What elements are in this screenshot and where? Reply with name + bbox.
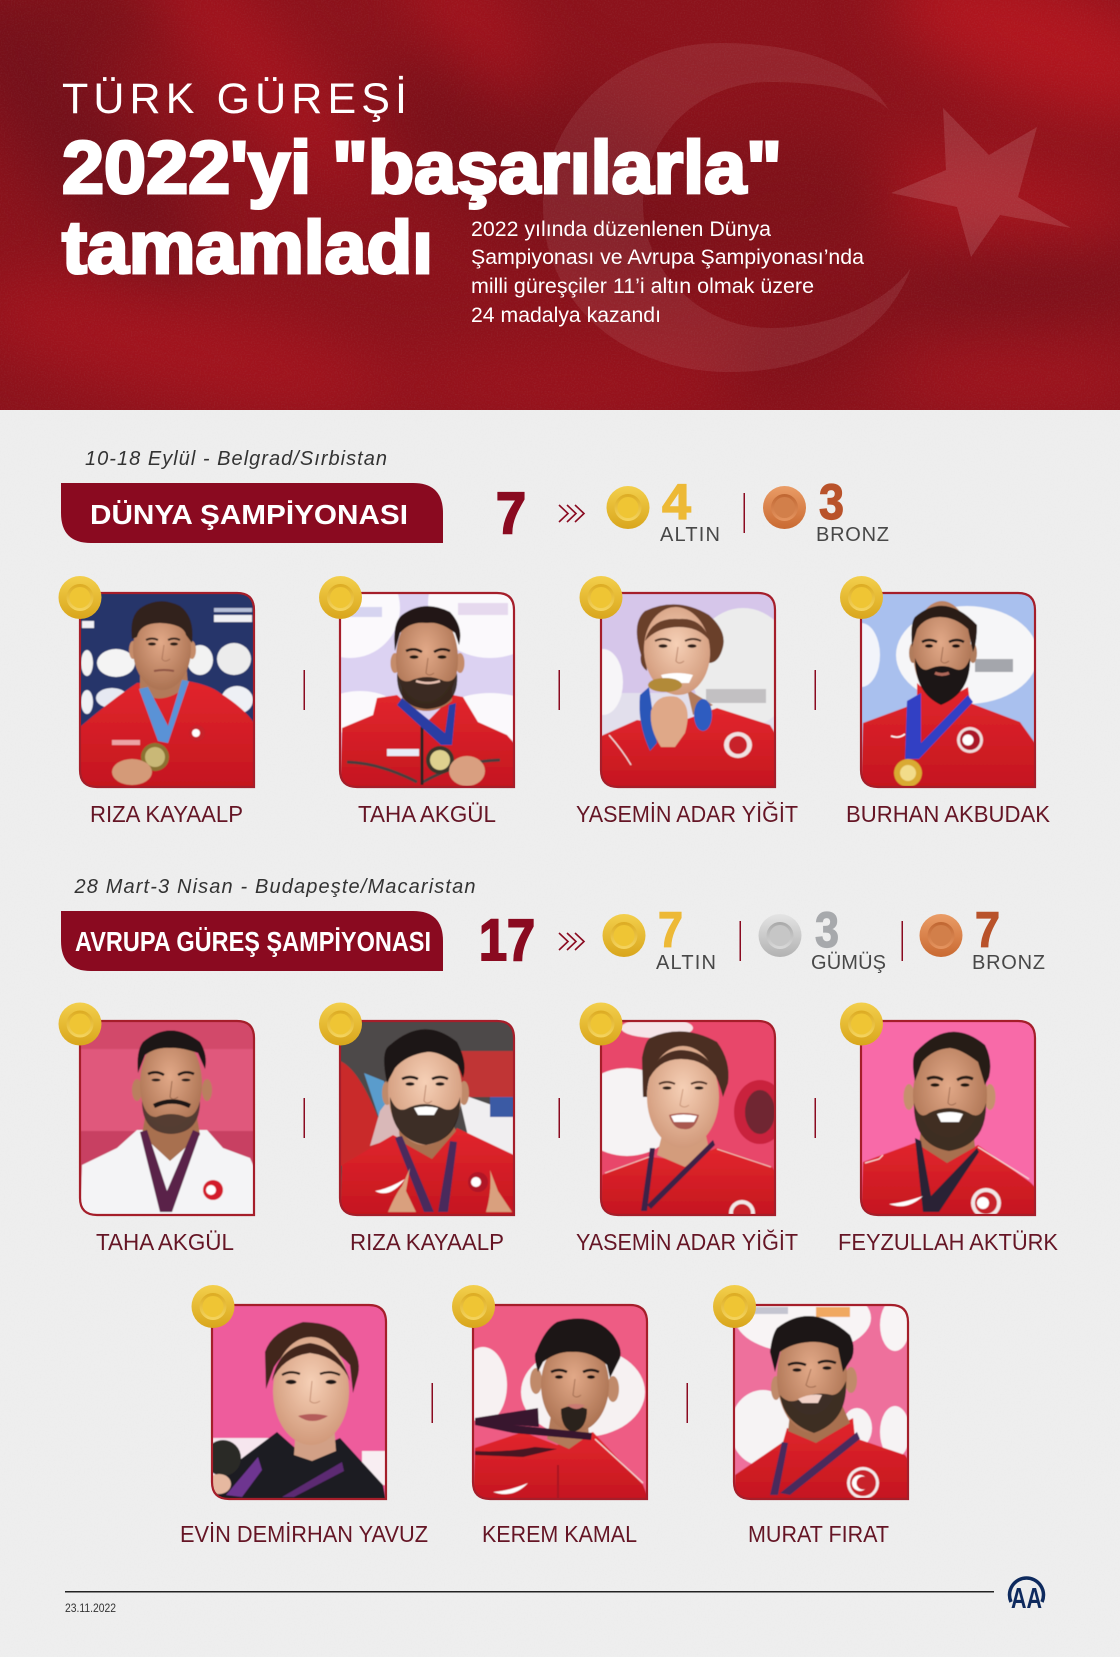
banner: DÜNYA ŞAMPİYONASI <box>90 499 408 530</box>
gold count <box>606 474 720 546</box>
name: RIZA KAYAALP <box>90 801 243 827</box>
star <box>891 108 1071 257</box>
medal <box>580 1002 622 1046</box>
name: KEREM KAMAL <box>482 1521 637 1547</box>
icon: AA logo <box>1010 1578 1044 1615</box>
medal <box>319 1002 362 1046</box>
medal <box>840 576 883 619</box>
athlete: Rıza Kayaalp (Avrupa) <box>319 1002 516 1255</box>
medal <box>713 1285 756 1328</box>
athlete: Kerem Kamal <box>452 1285 649 1547</box>
banner: AVRUPA GÜREŞ ŞAMPİYONASI <box>75 926 431 957</box>
bronze count: BRONZ <box>816 524 889 546</box>
date and place: 28 Mart-3 Nisan - Budapeşte/Macaristan <box>74 876 476 898</box>
medal <box>58 1002 102 1046</box>
silver count <box>758 902 886 974</box>
medal <box>840 1002 883 1046</box>
name: RIZA KAYAALP <box>350 1229 504 1255</box>
bronze count: 7 <box>975 902 1000 958</box>
medal <box>192 1285 234 1328</box>
athlete: Taha Akgül (Dünya) <box>319 576 516 822</box>
athlete: Feyzullah Aktürk (Avrupa) <box>838 1002 1059 1255</box>
bronze count: 3 <box>819 474 844 530</box>
bronze count: BRONZ <box>972 952 1045 974</box>
date and place: 10-18 Eylül - Belgrad/Sırbistan <box>85 448 387 470</box>
gold count <box>602 902 716 974</box>
header banner with flag <box>0 0 1120 445</box>
total 7: 7 <box>496 481 526 546</box>
name: BURHAN AKBUDAK <box>846 801 1051 827</box>
athlete: Yasemin Adar Yiğit (Dünya) <box>576 576 798 827</box>
athlete: Murat Fırat <box>713 1283 910 1547</box>
banner <box>61 483 443 543</box>
total 17: 17 <box>479 908 535 973</box>
medal <box>58 576 102 619</box>
section: Dünya Şampiyonası header <box>61 448 889 546</box>
name: FEYZULLAH AKTÜRK <box>838 1229 1059 1255</box>
main title line 1: 2022'yi "başarılarla" <box>62 126 782 209</box>
section: Avrupa Güreş Şampiyonası header <box>61 876 1045 974</box>
silver count: 3 <box>815 902 839 958</box>
intro text: Şampiyonası ve Avrupa Şampiyonası’nda <box>471 246 864 269</box>
supertitle: TÜRK GÜREŞİ <box>62 75 407 123</box>
crescent <box>543 43 911 372</box>
athlete: Burhan Akbudak (Dünya) <box>840 576 1051 827</box>
name: TAHA AKGÜL <box>358 801 496 827</box>
gold count: ALTIN <box>660 524 720 546</box>
medal <box>319 576 362 619</box>
athlete: Evin Demirhan Yavuz <box>180 1285 428 1547</box>
medal <box>452 1285 495 1328</box>
footer date: 23.11.2022 <box>65 1601 116 1615</box>
name: YASEMİN ADAR YİĞİT <box>576 1229 798 1255</box>
medal <box>580 576 622 619</box>
intro text: 2022 yılında düzenlenen Dünya <box>471 218 771 241</box>
name: MURAT FIRAT <box>748 1521 889 1547</box>
banner <box>61 911 443 971</box>
intro text: 24 madalya kazandı <box>471 304 661 327</box>
intro text: milli güreşçiler 11’i altın olmak üzere <box>471 275 814 298</box>
main title line 2: tamamladı <box>62 206 433 289</box>
gold count: 4 <box>662 474 691 530</box>
name: YASEMİN ADAR YİĞİT <box>576 801 798 827</box>
athlete: Rıza Kayaalp (Dünya) <box>58 576 256 827</box>
athlete: Yasemin Adar Yiğit (Avrupa) <box>575 1002 798 1255</box>
gold count: 7 <box>658 902 683 958</box>
bronze count <box>763 474 889 546</box>
arrow chevrons <box>559 933 584 950</box>
name: EVİN DEMİRHAN YAVUZ <box>180 1521 428 1547</box>
footer rule <box>65 1591 994 1592</box>
gold count: ALTIN <box>656 952 716 974</box>
silver count: GÜMÜŞ <box>811 952 886 974</box>
athlete: Taha Akgül (Avrupa) <box>58 1002 256 1255</box>
bronze count <box>920 902 1045 974</box>
name: TAHA AKGÜL <box>96 1229 234 1255</box>
arrow chevrons <box>559 505 584 522</box>
icon: AA logo: AA <box>1011 1583 1042 1615</box>
intro text <box>471 218 864 327</box>
